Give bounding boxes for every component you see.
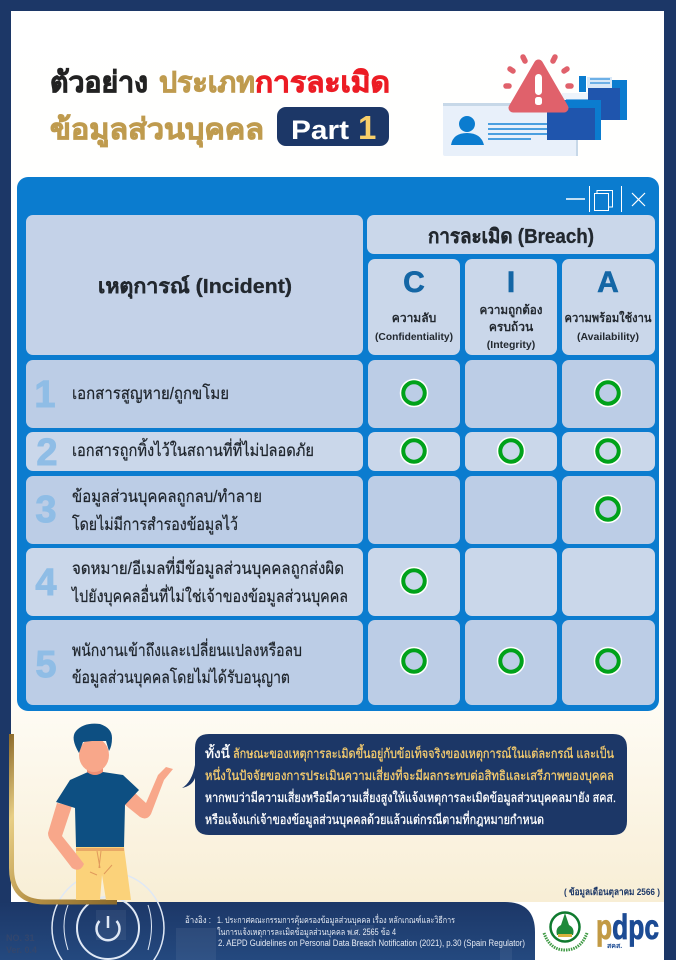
figure: man presenting (48, 724, 173, 900)
header: A availability: ความพร้อมใช้งาน (564, 310, 652, 325)
gold frame (12, 734, 117, 902)
header: I integrity (465, 259, 557, 355)
row 5: 5 (35, 644, 57, 686)
part 1 badge: 1 (358, 109, 376, 146)
icon: window controls (566, 186, 645, 212)
header: C confidentiality: ความลับ (392, 311, 436, 325)
speech bubble: หรือแจ้งแก่เจ้าของข้อมูลส่วนบุคคลด้วยแล้วแต่กรณีตามที่กฎหมายกำหนด (205, 811, 544, 828)
row 1: เอกสารสูญหาย/ถูกขโมย (72, 383, 229, 404)
version note (6, 933, 37, 955)
panel: window table frame (17, 177, 659, 711)
title: การละเมิด (255, 67, 390, 99)
speech bubble (182, 734, 627, 835)
row 1 (26, 360, 655, 428)
row 2: 2 (36, 432, 58, 474)
title: ตัวอย่าง (50, 67, 148, 99)
references: ในการแจ้งเหตุการละเมิดข้อมูลส่วนบุคคล พ.ศ. 2565 ข้อ 4 (217, 927, 396, 938)
header: C confidentiality: C (403, 266, 425, 299)
part 1 badge: Part (291, 115, 349, 145)
row 5: ข้อมูลส่วนบุคคลโดยไม่ได้รับอนุญาต (72, 667, 290, 688)
footer graphic: power rings (52, 872, 164, 960)
title: ประเภท (159, 67, 255, 99)
row 3: โดยไม่มีการสำรองข้อมูลไว้ (72, 514, 238, 535)
date note: ( ข้อมูลเดือนตุลาคม 2566 ) (564, 886, 660, 899)
row 2 (26, 432, 655, 474)
references: 1. ประกาศคณะกรรมการคุ้มครองข้อมูลส่วนบุคคล เรื่อง หลักเกณฑ์และวิธีการ (217, 913, 455, 926)
header: I integrity: I (507, 266, 515, 299)
header: I integrity: ความถูกต้อง (480, 303, 543, 318)
row 5 (26, 620, 655, 705)
header: I integrity: (Integrity) (487, 339, 535, 351)
row 3: ข้อมูลส่วนบุคคลถูกลบ/ทำลาย (72, 487, 262, 507)
header: I integrity: ครบถ้วน (489, 320, 534, 334)
row 4: จดหมาย/อีเมลที่มีข้อมูลส่วนบุคคลถูกส่งผิด (72, 556, 344, 579)
header: A availability (562, 259, 655, 355)
row 3 (26, 476, 655, 544)
version note: Ver. 0.4 (6, 945, 37, 955)
header: C confidentiality: (Confidentiality) (375, 331, 453, 343)
header: C confidentiality (368, 259, 460, 355)
row 3: 3 (35, 489, 57, 531)
logo: pdpc: pdpc (596, 908, 659, 947)
header: A availability: A (597, 266, 619, 299)
version note: NO. 31 (6, 933, 35, 943)
references (185, 913, 525, 948)
title (50, 67, 390, 147)
row 4: ไปยังบุคคลอื่นที่ไม่ใช่เจ้าของข้อมูลส่วนบุคคล (70, 584, 348, 607)
row 4 (26, 548, 655, 616)
row 2: เอกสารถูกทิ้งไว้ในสถานที่ที่ไม่ปลอดภัย (72, 438, 314, 461)
header: incident (26, 215, 363, 355)
row 5: พนักงานเข้าถึงและเปลี่ยนแปลงหรือลบ (72, 638, 302, 660)
speech bubble: ลักษณะของเหตุการละเมิดขึ้นอยู่กับข้อเท็จจริงของเหตุการณ์ในแต่ละกรณี และเป็น (233, 744, 614, 762)
title: ข้อมูลส่วนบุคคล (50, 114, 264, 147)
header: incident: เหตุการณ์ (Incident) (98, 275, 292, 299)
speech bubble: ทั้งนี้ (205, 744, 231, 761)
row 4: 4 (35, 562, 57, 604)
row 1: 1 (34, 374, 56, 416)
icon: data breach alert illustration (443, 57, 627, 156)
icon: government seal logo (544, 912, 587, 950)
part 1 badge (277, 107, 389, 146)
header: breach: การละเมิด (Breach) (428, 226, 594, 248)
header: breach (367, 215, 655, 254)
references: 2. AEPD Guidelines on Personal Data Breach Notification (2021), p.30 (Spain Regulator) (218, 938, 525, 948)
references: อ้างอิง : (185, 915, 211, 925)
logo: pdpc: สคส. (607, 943, 622, 950)
footer band (0, 902, 535, 960)
speech bubble: หนึ่งในปัจจัยของการประเมินความเสี่ยงที่จะมีผลกระทบต่อสิทธิและเสรีภาพของบุคคล (205, 767, 614, 784)
header: A availability: (Availability) (577, 331, 639, 343)
